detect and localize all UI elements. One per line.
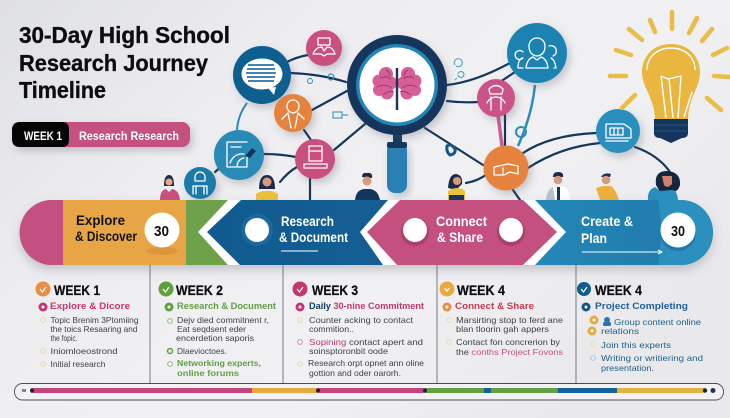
segment: research: & Document [279, 229, 348, 245]
column: week 4 project [577, 282, 703, 373]
column: week 1: Iniomloeostrond [50, 346, 118, 356]
column dividers [150, 265, 576, 384]
column: week 3: Counter acking to contact [309, 315, 414, 325]
column: week 4 connect: Contact fon concrerion by [456, 337, 561, 347]
column: week 4 connect: WEEK 4 [457, 282, 505, 298]
week pill: WEEK 1 [24, 131, 63, 143]
node: speech bubble [233, 46, 291, 104]
people row [160, 171, 680, 200]
column: week 1: Initial research [50, 359, 106, 369]
week pill [12, 122, 190, 147]
column: week 1: Explore & Dicore [50, 301, 130, 312]
column: week 2 [158, 282, 277, 378]
segment: create and plan: Create & [581, 213, 633, 229]
network connectors [215, 55, 670, 200]
node: blue chart card [214, 130, 264, 180]
segment: explore [63, 200, 186, 265]
title: Timeline [19, 77, 106, 103]
icon: light bulb [610, 12, 730, 143]
node: pink person top [306, 30, 342, 66]
column: week 4 connect: Connect & Share [455, 301, 534, 312]
column: week 3: Research orpt opnet ann oline [308, 358, 424, 368]
column: week 3: Sopining contact apert and [309, 337, 423, 347]
column: week 3: commition.. [309, 324, 354, 334]
column: week 1 [36, 282, 139, 369]
person 6 [596, 173, 619, 200]
person 5 [546, 172, 570, 200]
segment: create and plan [530, 200, 712, 265]
icon: brain [372, 67, 422, 110]
segment: connect and share: Connect [436, 213, 487, 229]
column: week 4 connect: the conths Project Fovons [456, 347, 563, 357]
magnifying glass with brain [347, 35, 447, 193]
column: week 4 project: presentation. [601, 363, 654, 373]
segment: explore: & Discover [75, 228, 137, 244]
timeline banner [20, 200, 713, 265]
column: week 4 connect [440, 282, 563, 357]
column: week 4 project: Join this experts [601, 340, 671, 350]
person 7 [648, 171, 680, 200]
column: week 4 project: Writing or writiering and [601, 353, 703, 363]
node: pink desk [295, 139, 335, 179]
column: week 2: Research & Document [177, 301, 277, 312]
column: week 1: WEEK 1 [54, 282, 100, 298]
column: week 2: online forums [177, 368, 239, 378]
segment: create and plan: 30 [671, 223, 685, 240]
column: week 1: the fopic. [50, 333, 78, 343]
column: week 1: Topic Brenim 3Ptomiing [50, 315, 139, 325]
column: week 2: encerdetion saporis [176, 333, 254, 343]
node: small blue robot [184, 167, 216, 199]
segment: create and plan: Plan [581, 230, 607, 246]
segment: explore: Explore [76, 212, 125, 228]
segment: explore: 30 [154, 223, 169, 240]
column: week 3 [292, 282, 425, 378]
segment: connect and share [360, 200, 566, 265]
person 2 [256, 175, 278, 200]
node: orange person [274, 94, 312, 132]
progress bar: w [21, 388, 26, 394]
title: Research Journey [19, 50, 208, 76]
node: blue team [507, 23, 567, 83]
segment: pink cap [20, 200, 63, 265]
segment: connect and share: & Share [437, 229, 483, 245]
person 4 [448, 174, 465, 200]
node: pink person right [477, 79, 515, 117]
title: 30-Day High School [19, 22, 230, 48]
column: week 1: the toics Resaaring and [50, 324, 138, 334]
column: week 4 project: Project Completing [595, 301, 688, 312]
column: week 2: WEEK 2 [176, 282, 223, 298]
segment: research: Research [281, 213, 334, 229]
progress bar [14, 384, 724, 400]
week pill: Research Research [79, 131, 179, 143]
segment: research [198, 200, 400, 265]
column: week 4 connect: Marsirting stop to ferd ane [456, 315, 563, 325]
title [19, 22, 230, 103]
column: week 2: Eat seqdsent eder [177, 324, 246, 334]
column: week 3: soinsptoronbit oode [309, 346, 388, 356]
column: week 3: WEEK 3 [312, 282, 358, 298]
column: week 4 connect: blan tloorin gah appers [456, 324, 549, 334]
column: week 4 project: WEEK 4 [595, 282, 642, 298]
node: orange box [484, 146, 528, 190]
column: week 4 project: Group content online [614, 317, 701, 327]
node: small blue device [596, 109, 640, 153]
person 3 [355, 173, 380, 200]
person 1 [160, 175, 180, 200]
column: week 3: Daily 30-nine Commitment [309, 301, 425, 312]
column: week 4 project: relations [601, 326, 639, 336]
column: week 3: gottion and oder oarorh. [309, 368, 401, 378]
column: week 2: Dejv died commitnent r, [177, 315, 269, 325]
segment: green [186, 200, 238, 265]
column: week 2: Dlaevioctoes. [177, 346, 227, 356]
column: week 2: Networking experts, [177, 358, 261, 368]
